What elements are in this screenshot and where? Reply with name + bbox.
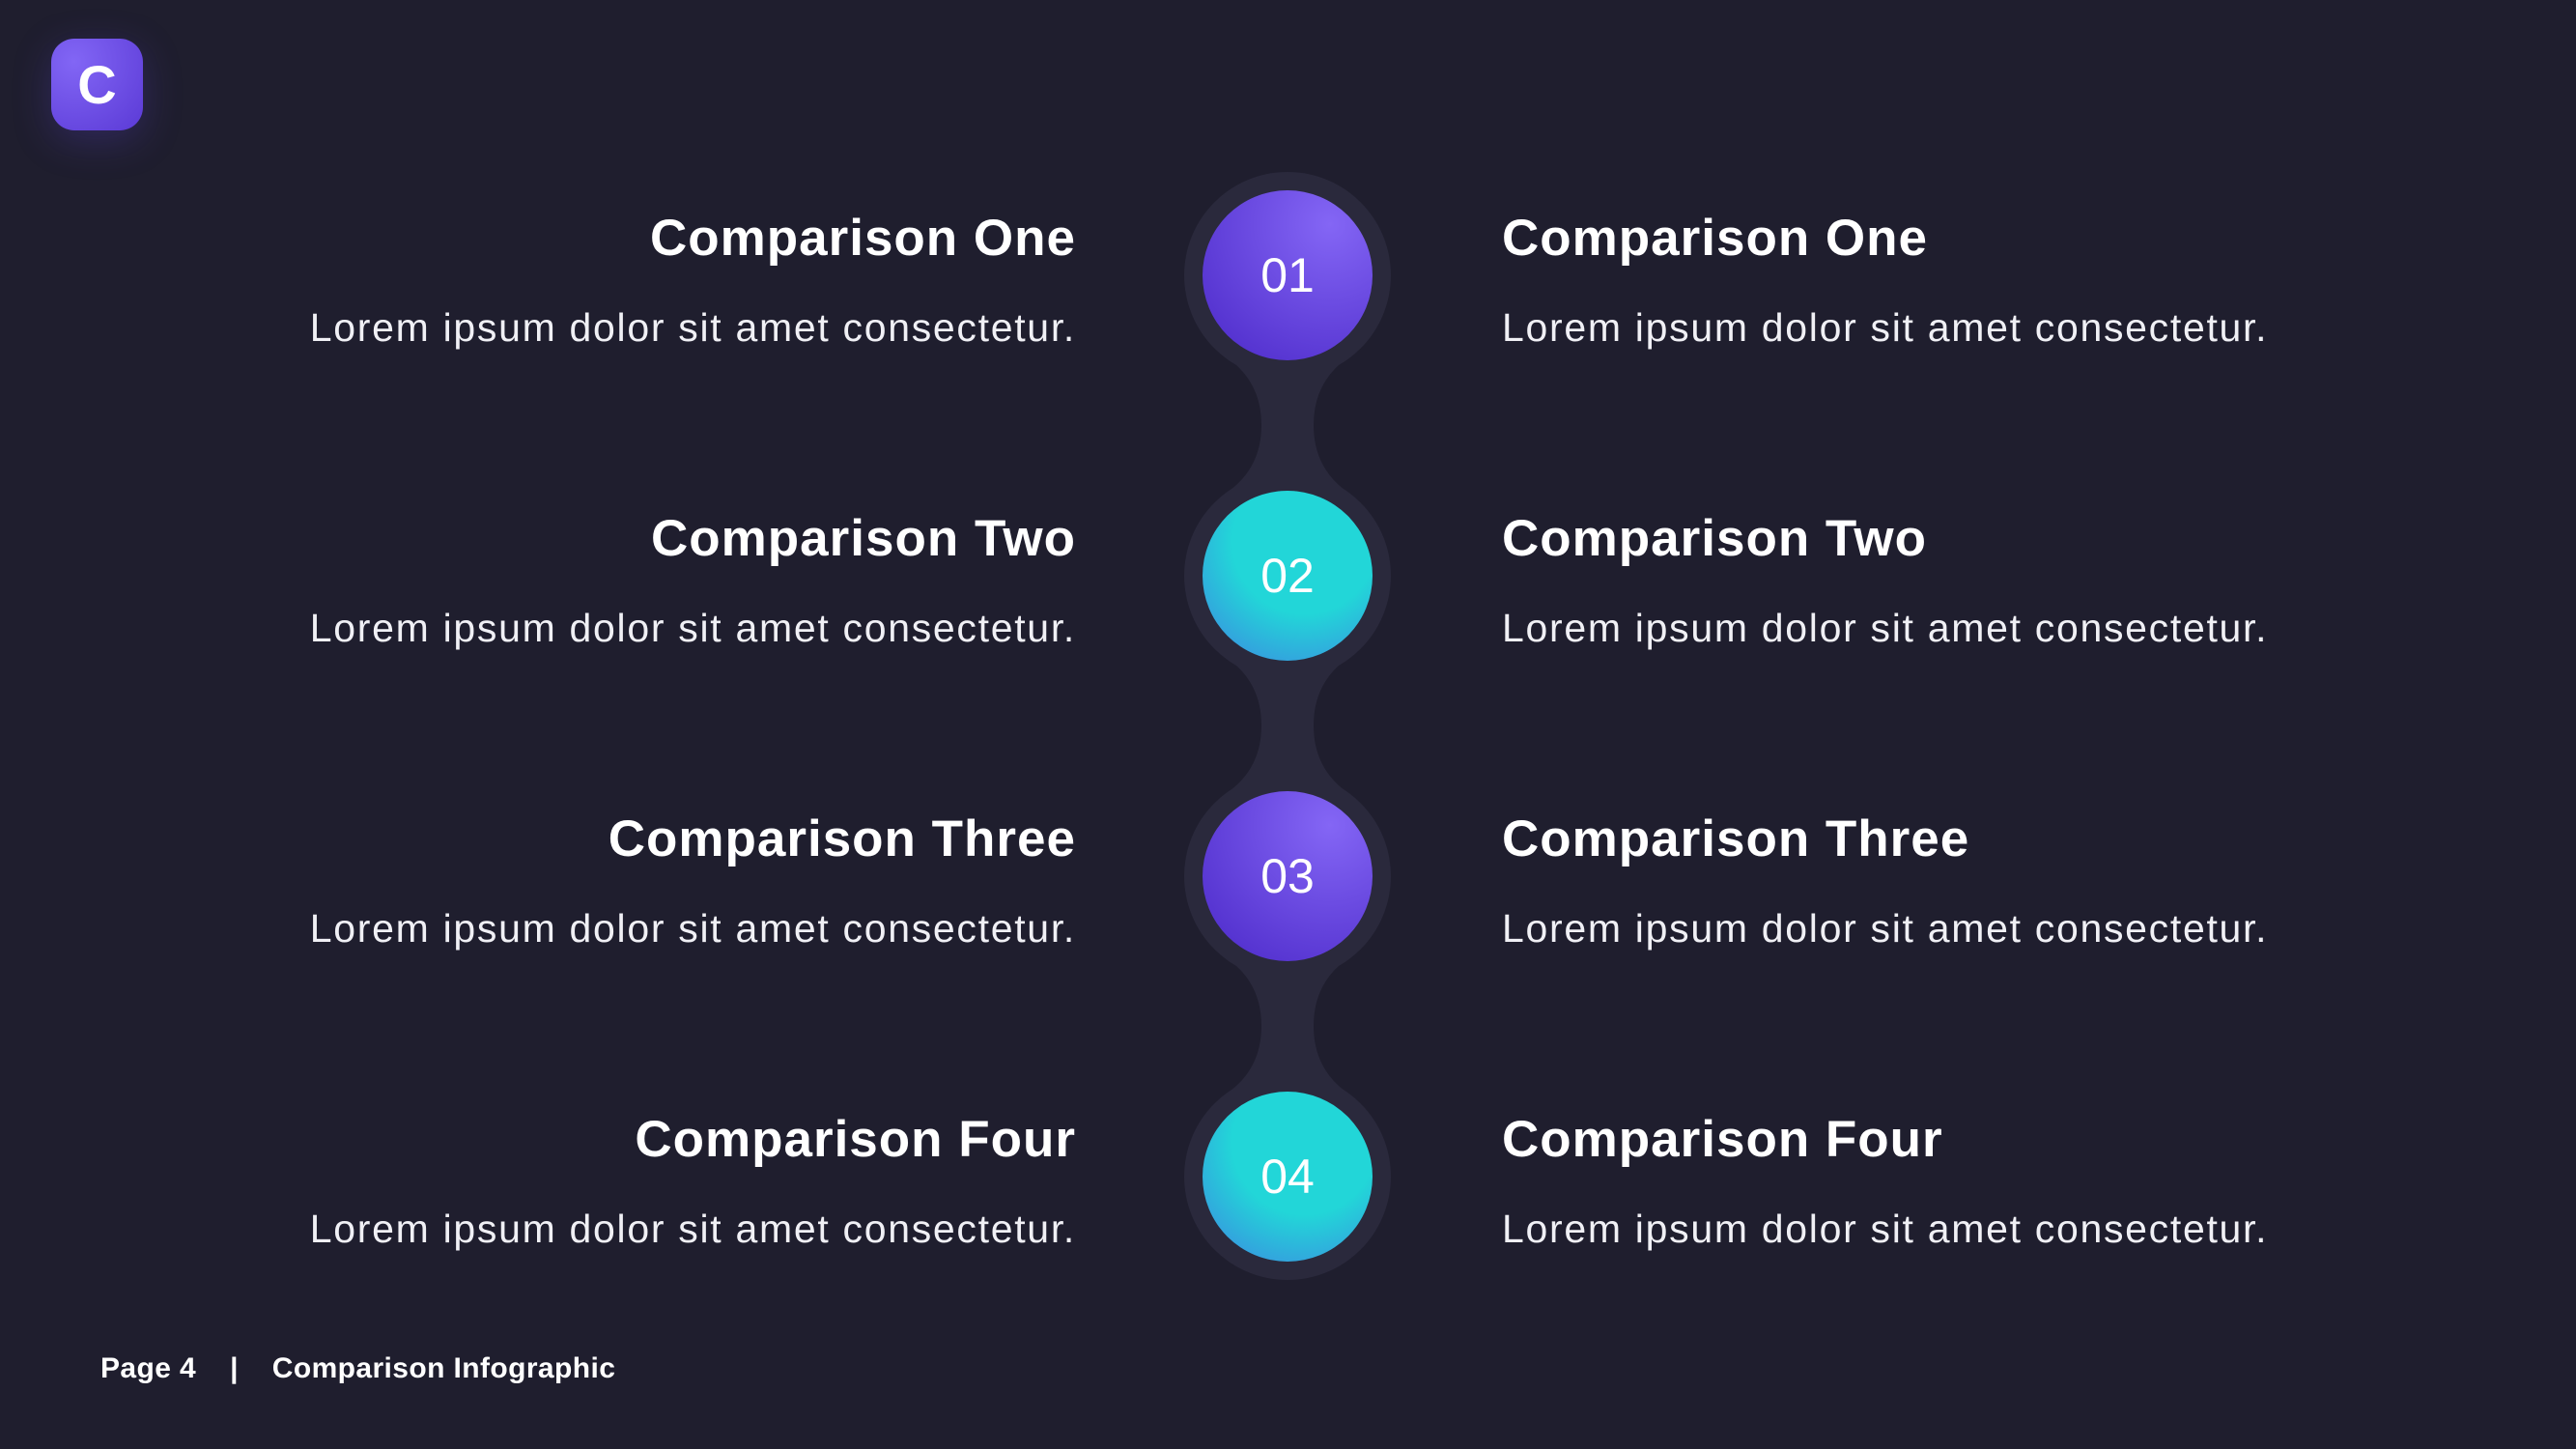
- right body 2: Lorem ipsum dolor sit amet consectetur.: [1502, 606, 2268, 650]
- right heading 2: Comparison Two: [1502, 510, 1927, 567]
- left body 1: Lorem ipsum dolor sit amet consectetur.: [310, 305, 1076, 350]
- circle 04: 04: [1260, 1150, 1315, 1204]
- left heading 3: Comparison Three: [609, 810, 1076, 867]
- circle 04: [1203, 1092, 1373, 1262]
- circle 03: [1203, 791, 1373, 961]
- circle 02: [1203, 491, 1373, 661]
- right heading 3: Comparison Three: [1502, 810, 1969, 867]
- right body 1: Lorem ipsum dolor sit amet consectetur.: [1502, 305, 2268, 350]
- right body 3: Lorem ipsum dolor sit amet consectetur.: [1502, 906, 2268, 951]
- right heading 1: Comparison One: [1502, 210, 1928, 267]
- logo badge: C: [77, 54, 117, 115]
- left heading 4: Comparison Four: [635, 1111, 1076, 1168]
- circle 01: [1203, 190, 1373, 360]
- footer: Page 4 | Comparison Infographic: [100, 1352, 615, 1384]
- left heading 2: Comparison Two: [651, 510, 1076, 567]
- left heading 1: Comparison One: [650, 210, 1076, 267]
- circle 02: 02: [1260, 549, 1315, 603]
- left body 2: Lorem ipsum dolor sit amet consectetur.: [310, 606, 1076, 650]
- right heading 4: Comparison Four: [1502, 1111, 1943, 1168]
- circle 01: 01: [1260, 248, 1315, 302]
- logo badge: [51, 39, 143, 130]
- right body 4: Lorem ipsum dolor sit amet consectetur.: [1502, 1207, 2268, 1251]
- circle 03: 03: [1260, 849, 1315, 903]
- left body 3: Lorem ipsum dolor sit amet consectetur.: [310, 906, 1076, 951]
- left body 4: Lorem ipsum dolor sit amet consectetur.: [310, 1207, 1076, 1251]
